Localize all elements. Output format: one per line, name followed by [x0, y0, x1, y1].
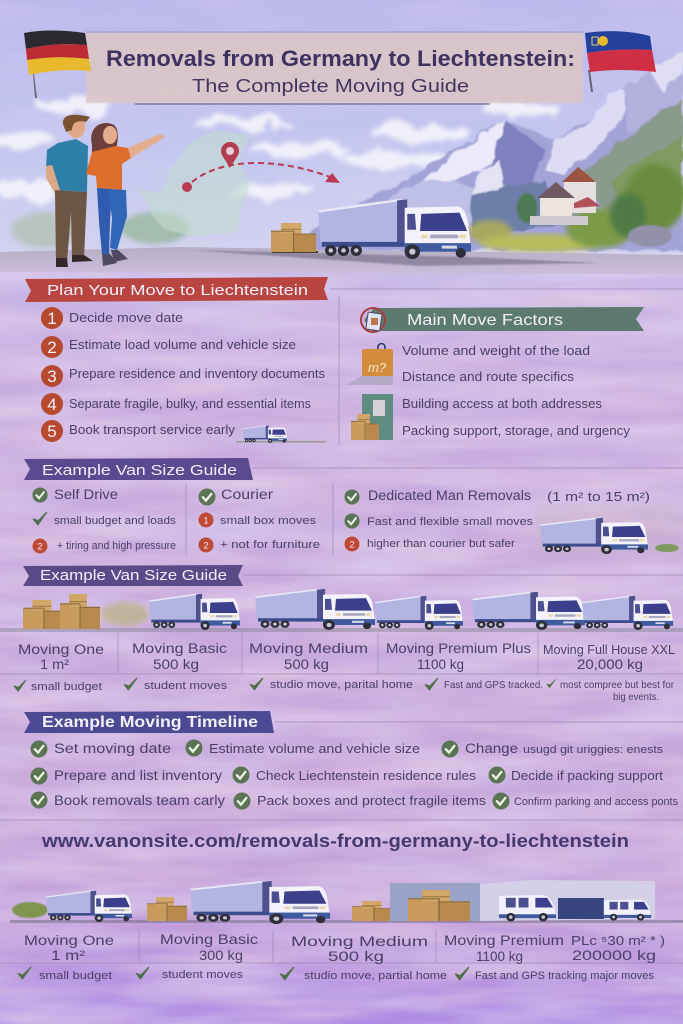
step 3: 3: [47, 367, 57, 386]
step 2: 2: [47, 338, 57, 357]
step 3: [41, 365, 325, 387]
step 3: Prepare residence and inventory documents: [69, 367, 325, 381]
step 4: 4: [47, 395, 57, 414]
column: self drive: + tiring and high pressure: [57, 540, 176, 552]
tier: moving medium: studio move, parital home: [270, 679, 413, 691]
column: dedicated man removals: (1 m² to 15 m²): [547, 490, 650, 504]
factor 4: Packing support, storage, and urgency: [402, 424, 631, 438]
column: courier: 2: [203, 540, 209, 550]
title: Removals from Germany to Liechtenstein:: [106, 46, 575, 71]
factor 1: Volume and weight of the load: [402, 344, 590, 358]
moving truck with boxes: [271, 199, 471, 259]
castle: [530, 167, 600, 225]
bottom tier: moving basic: Moving Basic: [160, 932, 258, 947]
heading ribbon: tiers: Example Van Size Guide: [40, 568, 227, 584]
tier: moving basic: student moves: [144, 680, 228, 692]
column: dedicated man removals: 2: [349, 540, 355, 550]
bottom tier: moving one: [18, 933, 114, 982]
road: [0, 247, 683, 274]
timeline row 3: Pack boxes and protect fragile items: [257, 794, 486, 808]
factor 2: Distance and route specifics: [402, 370, 574, 384]
timeline row 3: Book removals team carly: [54, 793, 225, 808]
panel: example moving timeline: [24, 711, 678, 810]
icon: building and boxes: [351, 394, 393, 440]
panel: main move factors: [346, 307, 644, 440]
tier: moving premium plus: 1100 kg: [417, 657, 464, 672]
heading ribbon: tiers: [23, 565, 243, 586]
website url: www.vanonsite.com/removals-from-germany-to-liechtenstein: [41, 831, 629, 851]
timeline row 2: Prepare and list inventory: [54, 768, 222, 783]
timeline row 3: Confirm parking and access ponts: [514, 796, 678, 808]
tier: moving full house xxl: [543, 643, 675, 703]
subtitle: The Complete Moving Guide: [192, 76, 469, 96]
bottom vehicle row: [10, 880, 683, 924]
tier: moving premium plus: Moving Premium Plus: [386, 641, 531, 656]
tier: moving premium plus: Fast and GPS tracked.: [444, 680, 543, 691]
column: courier: small box moves: [220, 515, 317, 527]
bottom tier: moving medium: [280, 934, 447, 982]
timeline row 1: Estimate volume and vehicle size: [209, 742, 420, 756]
panel: example van size guide, services: [24, 458, 683, 555]
map pin: [221, 142, 239, 168]
heading ribbon: services: [24, 458, 253, 480]
tier: moving one: small budget: [31, 681, 102, 693]
factor 3: Building access at both addresses: [402, 397, 602, 411]
tier: moving one: Moving One: [18, 642, 104, 657]
icon: bag with m?: [346, 344, 393, 385]
bottom tier: moving one: 1 m²: [51, 948, 86, 963]
person: woman: [86, 123, 165, 266]
timeline row 1: usugd git uriggies: enests: [523, 744, 664, 756]
panel: plan your move: [25, 277, 328, 443]
truck illustration: [535, 505, 683, 555]
step 5: 5: [47, 422, 57, 441]
tier: moving medium: Moving Medium: [249, 641, 368, 656]
tier: moving one: [14, 642, 104, 693]
bottom tier: moving medium: 500 kg: [328, 949, 384, 964]
column: courier: 1: [203, 516, 209, 526]
sky and clouds: [0, 0, 683, 272]
vehicle row: [0, 589, 683, 632]
timeline row 2: Check Liechtenstein residence rules: [256, 769, 476, 783]
step 4: [41, 393, 311, 415]
panel: van size tiers: [0, 565, 683, 703]
hills left and trees: [11, 164, 683, 252]
tier: moving basic: 500 kg: [153, 657, 199, 672]
step 1: [41, 307, 183, 329]
tier: moving full house xxl: Moving Full House XXL: [543, 643, 675, 657]
bottom tier: moving medium: Moving Medium: [291, 934, 428, 949]
tier: moving basic: Moving Basic: [132, 641, 227, 656]
tier: moving medium: [249, 641, 413, 691]
bottom tier: moving premium: 1100 kg: [476, 949, 523, 964]
step 2: Estimate load volume and vehicle size: [69, 338, 296, 352]
tier: moving medium: 500 kg: [284, 657, 329, 672]
icon: bag with m?: m?: [368, 360, 387, 375]
flag: Liechtenstein: [585, 31, 656, 92]
heading ribbon: plan: Plan Your Move to Liechtenstein: [47, 282, 308, 299]
heading ribbon: services: Example Van Size Guide: [42, 462, 237, 479]
bottom tier: moving premium: PLc ⁵30 m² * ): [571, 934, 665, 948]
step 5: [41, 420, 236, 442]
bottom tier: moving basic: student moves: [162, 969, 244, 981]
bottom tier: moving premium: Fast and GPS tracking major moves: [475, 970, 654, 982]
timeline row 3: [30, 792, 678, 810]
step 4: Separate fragile, bulky, and essential items: [69, 397, 311, 411]
timeline row 1: Change: [465, 741, 518, 756]
flag: Germany: [24, 30, 91, 98]
panel: bottom vehicle tiers: [10, 880, 683, 982]
column: self drive: Self Drive: [54, 487, 118, 502]
column: dedicated man removals: [344, 488, 650, 552]
column: self drive: [32, 487, 177, 554]
bottom tier: moving basic: [136, 932, 258, 981]
step 2: [41, 336, 296, 358]
small truck icon: [236, 425, 326, 443]
tier: moving full house xxl: most compree but best for: [560, 680, 675, 691]
route arrow: [182, 163, 340, 192]
step 1: 1: [47, 309, 57, 328]
timeline row 2: Decide if packing support: [511, 769, 664, 783]
heading ribbon: plan: [25, 277, 328, 302]
map of Germany: [137, 130, 250, 236]
column: courier: + not for furniture: [220, 539, 320, 551]
bottom tier: moving basic: 300 kg: [199, 948, 243, 963]
bottom tier: moving premium: 200000 kg: [572, 948, 656, 963]
column: self drive: small budget and loads: [54, 515, 177, 527]
hero scene: [0, 0, 683, 274]
column: dedicated man removals: Fast and flexible small moves: [367, 516, 534, 528]
tier: moving full house xxl: 20,000 kg: [577, 657, 643, 672]
column: dedicated man removals: Dedicated Man Removals: [368, 488, 531, 503]
column: courier: [198, 487, 320, 552]
person: man: [46, 115, 93, 267]
icon: map and clipboard: [361, 308, 385, 332]
step 1: Decide move date: [69, 311, 183, 325]
step 5: Book transport service early: [69, 423, 236, 437]
heading ribbon: factors: Main Move Factors: [407, 312, 563, 329]
heading ribbon: factors: [364, 307, 644, 331]
bottom tier: moving one: Moving One: [24, 933, 114, 948]
bottom tier: moving premium: [444, 933, 665, 982]
timeline row 1: [30, 740, 664, 758]
bottom tier: moving one: small budget: [39, 970, 112, 982]
column: self drive: 2: [37, 542, 43, 552]
heading ribbon: timeline: Example Moving Timeline: [42, 714, 258, 731]
tier: moving premium plus: [386, 641, 543, 691]
timeline row 2: [30, 766, 664, 784]
tier: moving one: 1 m²: [40, 657, 70, 672]
bottom tier: moving premium: Moving Premium: [444, 933, 564, 948]
tier: moving full house xxl: big events.: [613, 692, 659, 703]
heading ribbon: timeline: [24, 711, 274, 733]
title banner: [86, 32, 583, 104]
tier: moving basic: [124, 641, 228, 692]
bottom tier: moving medium: studio move, partial home: [304, 970, 447, 982]
divider lines: [0, 289, 683, 963]
column: courier: Courier: [221, 487, 274, 502]
mountains: [300, 52, 683, 250]
column: dedicated man removals: higher than courier but safer: [367, 538, 515, 550]
timeline row 1: Set moving date: [54, 741, 171, 756]
